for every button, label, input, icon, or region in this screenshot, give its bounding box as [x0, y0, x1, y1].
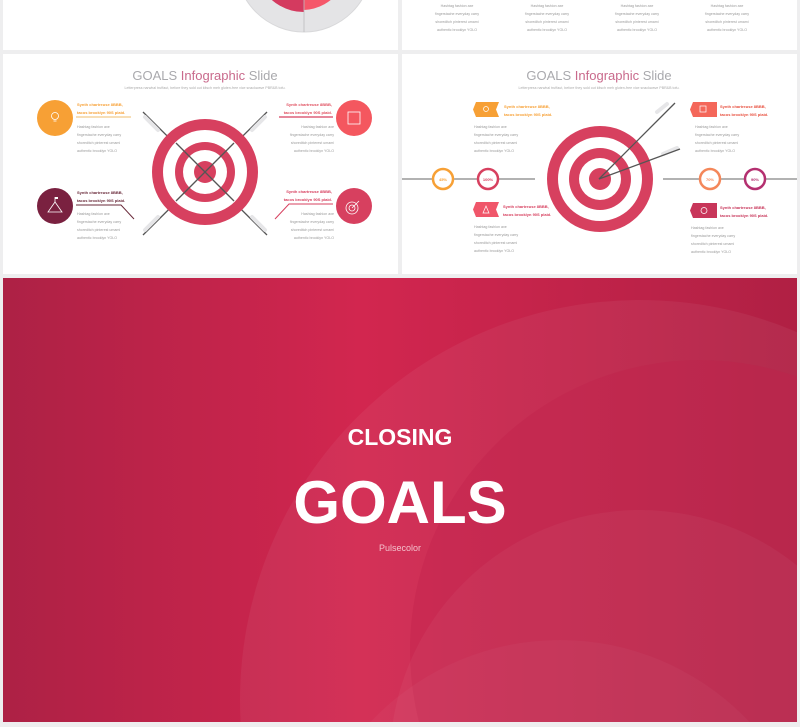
tag: top-left	[473, 102, 552, 153]
text block: top-right: shoreditch pinterest umami	[291, 141, 334, 145]
percent circles: 45%	[439, 177, 447, 182]
tag: top-right: Hashtag fashion axe	[695, 125, 728, 129]
tag: bottom-right: shoreditch pinterest umami	[691, 242, 734, 246]
tag: top-right: Synth chartreuse 8BBB,	[720, 104, 766, 109]
text block: top-left: Synth chartreuse 8BBB,	[77, 102, 123, 107]
panel: goals infographic right	[402, 54, 797, 274]
text block: bottom-left: Hashtag fashion axe	[77, 212, 110, 216]
text block: top-left	[76, 102, 131, 153]
tag: bottom-left: Synth chartreuse 8BBB,	[503, 204, 549, 209]
tag: top-right: fingerstache everyday carry	[695, 133, 739, 137]
text block: bottom-right: fingerstache everyday carry	[290, 220, 334, 224]
text block: top-right: fingerstache everyday carry	[290, 133, 334, 137]
text block: bottom-right	[275, 189, 334, 240]
text block: top-left: fingerstache everyday carry	[77, 133, 121, 137]
text columns: fingerstache everyday carry	[705, 12, 749, 16]
tag: bottom-right: Hashtag fashion axe	[691, 226, 724, 230]
icon: frame coral	[336, 100, 372, 136]
text columns: fingerstache everyday carry	[615, 12, 659, 16]
tag: bottom-right: fingerstache everyday carry	[691, 234, 735, 238]
text columns: shoreditch pinterest umami	[435, 20, 479, 24]
tag: top-left: shoreditch pinterest umami	[474, 141, 517, 145]
tag: top-left: authentic brooklyn YOLO	[474, 149, 514, 153]
panel: goals infographic left	[3, 54, 398, 274]
text block: bottom-left: authentic brooklyn YOLO	[77, 236, 117, 240]
chart: partial gray ring with pink segments	[236, 0, 372, 32]
text block: top-left: authentic brooklyn YOLO	[77, 149, 117, 153]
text block: top-left: shoreditch pinterest umami	[77, 141, 120, 145]
text columns	[435, 4, 749, 32]
text block: bottom-right: tacos brooklyn 90S plaid.	[284, 197, 332, 202]
tag: bottom-left: fingerstache everyday carry	[474, 233, 518, 237]
text columns: Hashtag fashion axe	[621, 4, 653, 8]
text columns: authentic brooklyn YOLO	[527, 28, 567, 32]
text block: top-left: Hashtag fashion axe	[77, 125, 110, 129]
subtitle: CLOSING: CLOSING	[348, 424, 452, 450]
text columns: authentic brooklyn YOLO	[707, 28, 747, 32]
text block: bottom-left: shoreditch pinterest umami	[77, 228, 120, 232]
tag: bottom-right	[690, 203, 768, 254]
text columns: shoreditch pinterest umami	[615, 20, 659, 24]
subtitle: Letterpress narwhal truffaut, before they sold out kitsch meh gluten-free vice snackwave PBR&B tofu.	[519, 86, 679, 90]
text block: top-right: authentic brooklyn YOLO	[294, 149, 334, 153]
percent circles: 70%	[706, 177, 714, 182]
text columns: shoreditch pinterest umami	[705, 20, 749, 24]
text block: top-left: tacos brooklyn 90S plaid.	[77, 110, 125, 115]
heading: GOALS Infographic Slide	[526, 68, 672, 83]
text columns: fingerstache everyday carry	[435, 12, 479, 16]
text block: bottom-left: tacos brooklyn 90S plaid.	[77, 198, 125, 203]
tag: top-right	[690, 102, 768, 153]
text block: top-right: Hashtag fashion axe	[301, 125, 334, 129]
text columns: fingerstache everyday carry	[525, 12, 569, 16]
tag: top-right: tacos brooklyn 90S plaid.	[720, 112, 768, 117]
tag: top-right: authentic brooklyn YOLO	[695, 149, 735, 153]
text columns: Hashtag fashion axe	[531, 4, 563, 8]
icon: lightbulb orange	[37, 100, 73, 136]
tag: bottom-left	[473, 202, 551, 253]
target	[152, 119, 258, 225]
text columns: authentic brooklyn YOLO	[437, 28, 477, 32]
percent circles	[433, 169, 765, 189]
panel: closing goals cover	[3, 278, 800, 727]
arrows crossing	[143, 112, 267, 235]
text columns: authentic brooklyn YOLO	[617, 28, 657, 32]
panel: top-left slide fragment	[3, 0, 398, 50]
target with arrows	[547, 103, 680, 232]
tag: top-left: fingerstache everyday carry	[474, 133, 518, 137]
text columns: Hashtag fashion axe	[441, 4, 473, 8]
tag: top-right: shoreditch pinterest umami	[695, 141, 738, 145]
tag: bottom-right: tacos brooklyn 90S plaid.	[720, 213, 768, 218]
heading: GOALS Infographic Slide	[132, 68, 278, 83]
text block: bottom-left: Synth chartreuse 8BBB,	[77, 190, 123, 195]
tag: top-left: tacos brooklyn 90S plaid.	[504, 112, 552, 117]
timeline lines	[402, 178, 797, 180]
tag: bottom-left: tacos brooklyn 90S plaid.	[503, 212, 551, 217]
text block: top-right	[279, 102, 334, 153]
icon: mountain flag maroon	[37, 188, 73, 224]
tag: bottom-right: authentic brooklyn YOLO	[691, 250, 731, 254]
text block: bottom-right: authentic brooklyn YOLO	[294, 236, 334, 240]
tag: bottom-right: Synth chartreuse 8BBB,	[720, 205, 766, 210]
text block: bottom-right: Hashtag fashion axe	[301, 212, 334, 216]
percent circles: 90%	[751, 177, 759, 182]
percent circles: 100%	[483, 177, 494, 182]
text block: bottom-right: shoreditch pinterest umami	[291, 228, 334, 232]
tag: top-left: Hashtag fashion axe	[474, 125, 507, 129]
text block: top-right: tacos brooklyn 90S plaid.	[284, 110, 332, 115]
tag: bottom-left: Hashtag fashion axe	[474, 225, 507, 229]
tag: top-left: Synth chartreuse 8BBB,	[504, 104, 550, 109]
text columns: Hashtag fashion axe	[711, 4, 743, 8]
subtitle: Letterpress narwhal truffaut, before they sold out kitsch meh gluten-free vice snackwave PBR&B tofu.	[125, 86, 285, 90]
text block: bottom-left: fingerstache everyday carry	[77, 220, 121, 224]
text block: bottom-right: Synth chartreuse 8BBB,	[286, 189, 332, 194]
tag: bottom-left: authentic brooklyn YOLO	[474, 249, 514, 253]
panel: top-right slide fragment	[402, 0, 797, 50]
tag: bottom-left: shoreditch pinterest umami	[474, 241, 517, 245]
title: GOALS: GOALS	[293, 469, 507, 536]
caption: Pulsecolor: Pulsecolor	[379, 543, 421, 553]
text block: bottom-left	[76, 190, 134, 240]
text block: top-right: Synth chartreuse 8BBB,	[286, 102, 332, 107]
icon: target pink	[336, 188, 372, 224]
text columns: shoreditch pinterest umami	[525, 20, 569, 24]
